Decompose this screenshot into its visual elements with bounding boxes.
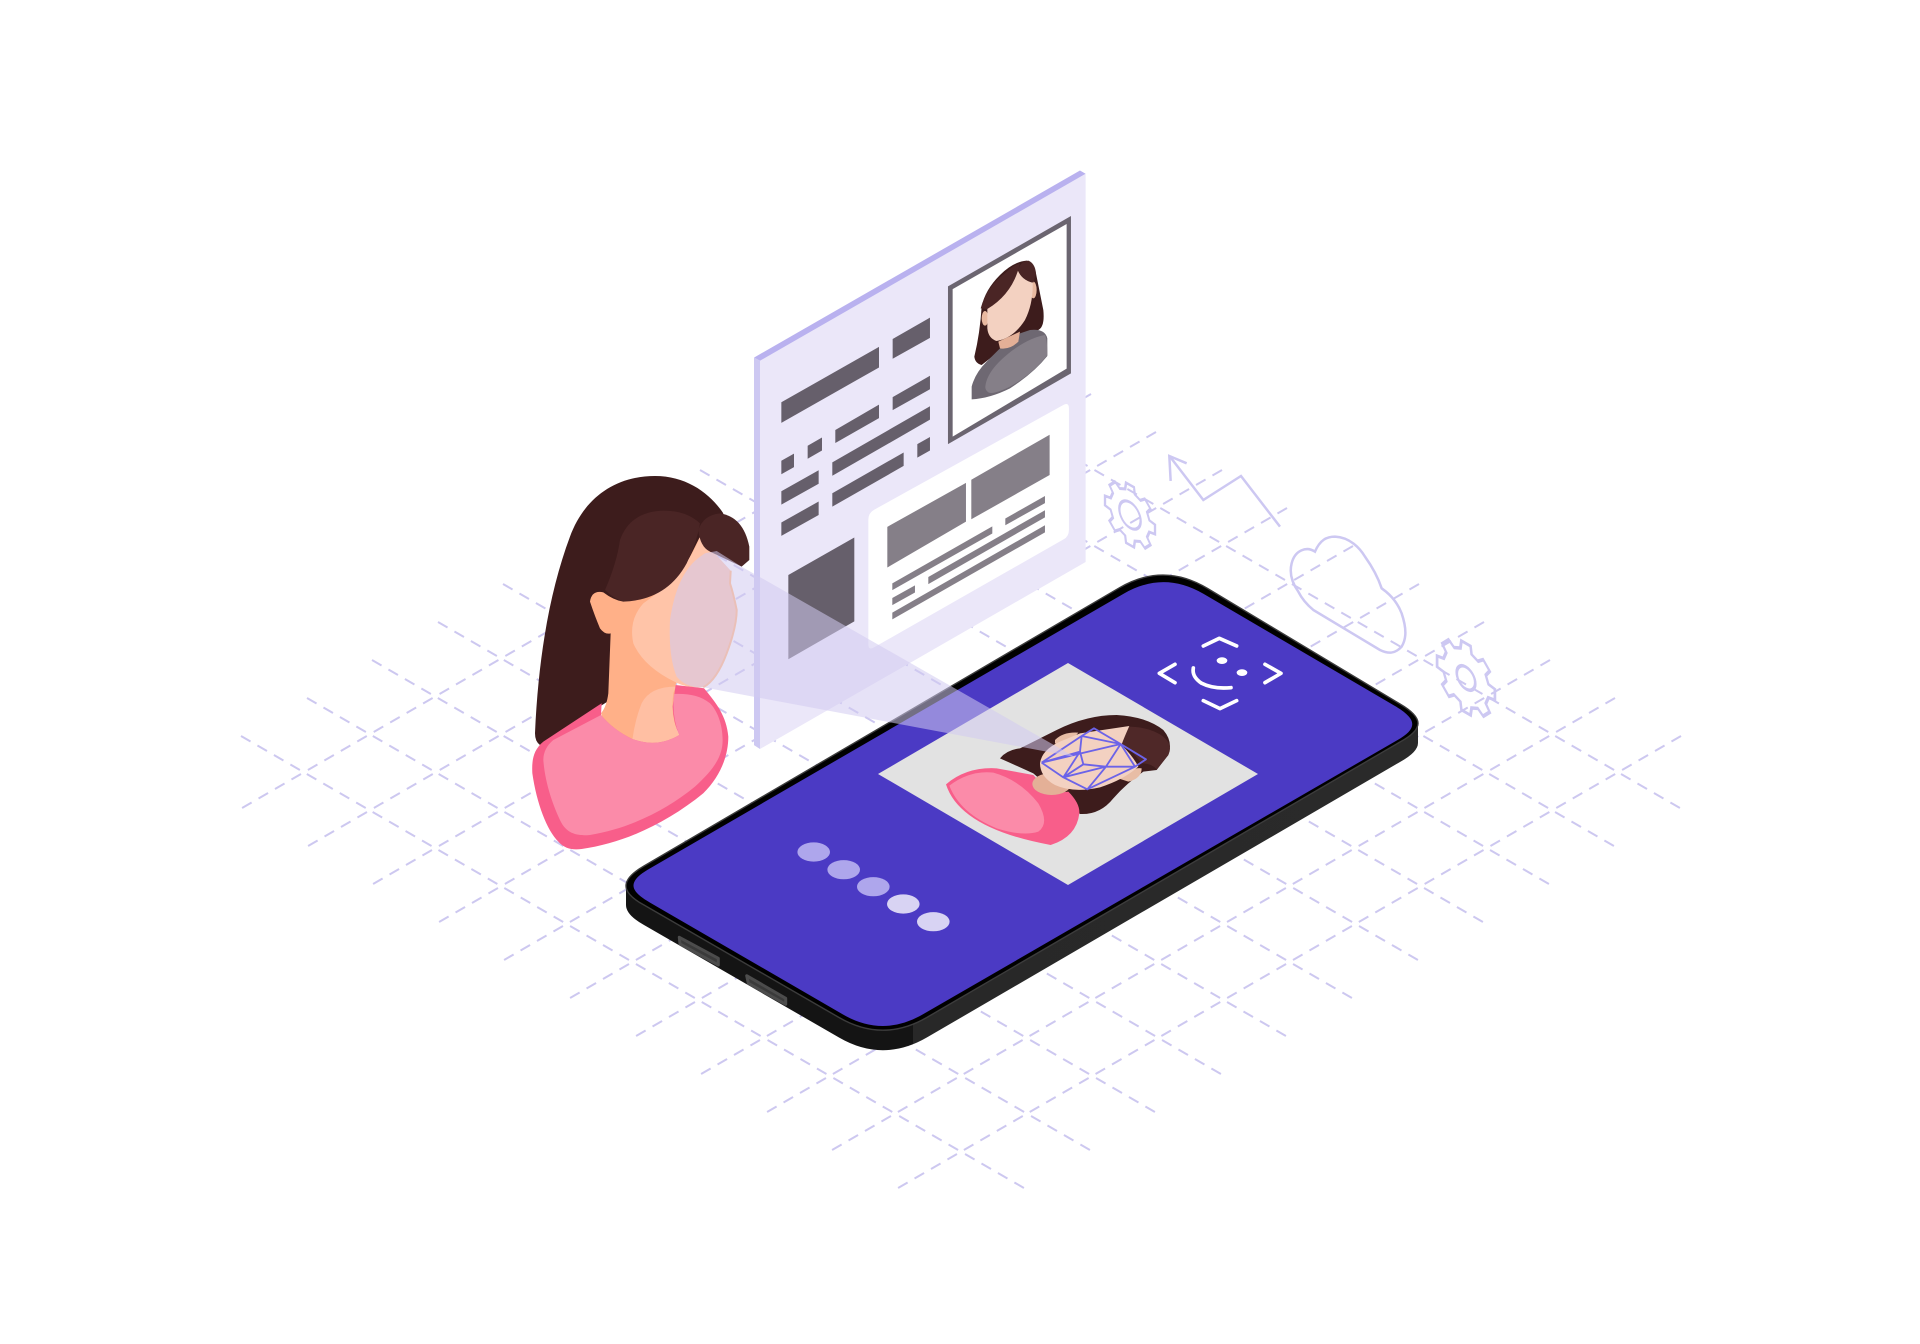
- scanning light beam from face to phone: [670, 551, 1075, 757]
- photo card on screen: [878, 663, 1258, 885]
- smartphone: [626, 575, 1418, 1050]
- face scan icon: [1159, 638, 1281, 709]
- neck and ear: [590, 537, 707, 753]
- document text bars: [781, 318, 930, 536]
- icon: cloud: [1291, 537, 1405, 653]
- document photo frame: [948, 216, 1071, 444]
- isometric dashed floor grid: [241, 356, 1681, 1188]
- face outline edge: [703, 571, 737, 687]
- phone body: [626, 723, 1418, 1050]
- document dark square: [788, 537, 854, 659]
- phone screen: [634, 582, 1412, 1026]
- icon: large gear: [1437, 627, 1495, 729]
- woman looking at phone: [532, 476, 749, 849]
- neck highlight: [632, 687, 687, 753]
- portrait on screen: [946, 715, 1170, 845]
- phone bezel: [626, 575, 1418, 1030]
- phone side button 2: [747, 976, 786, 1004]
- icon: growth arrow: [1169, 456, 1280, 527]
- passcode dots: [797, 842, 950, 931]
- phone side button: [679, 937, 718, 965]
- panel: floating ID document: [754, 171, 1086, 749]
- hair bang: [698, 513, 749, 567]
- face: [632, 537, 737, 687]
- shirt: [532, 685, 728, 849]
- document white card: [868, 404, 1069, 648]
- hair front: [605, 511, 700, 602]
- document portrait: [972, 261, 1047, 399]
- face mesh: [1042, 728, 1146, 789]
- hair back: [535, 476, 723, 745]
- icon: small gear: [1105, 471, 1155, 559]
- shirt highlight: [543, 694, 723, 835]
